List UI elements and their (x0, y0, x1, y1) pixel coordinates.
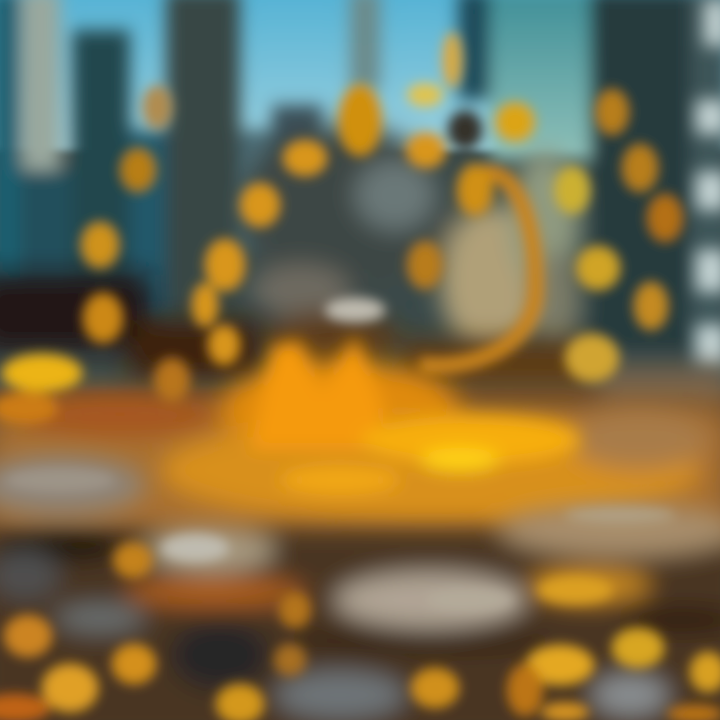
gold bar at left (0, 354, 82, 424)
tower window stripes (696, 0, 720, 367)
falling coins left (81, 85, 190, 402)
falling coins right (565, 89, 683, 382)
dark ground band (0, 275, 720, 405)
flames and bright highlights (250, 335, 580, 494)
background sky (0, 0, 720, 180)
lower plates of silver and coins (0, 455, 720, 720)
bottom coins (0, 542, 720, 720)
silver coin highlights (5, 298, 675, 612)
swirl interior (240, 125, 580, 370)
skyscrapers (0, 0, 720, 390)
mid warm band (0, 400, 720, 550)
coin ring right arc (407, 32, 590, 366)
mid city backdrop (0, 150, 720, 390)
central golden burst (20, 360, 710, 525)
coin ring left arc (192, 84, 446, 365)
